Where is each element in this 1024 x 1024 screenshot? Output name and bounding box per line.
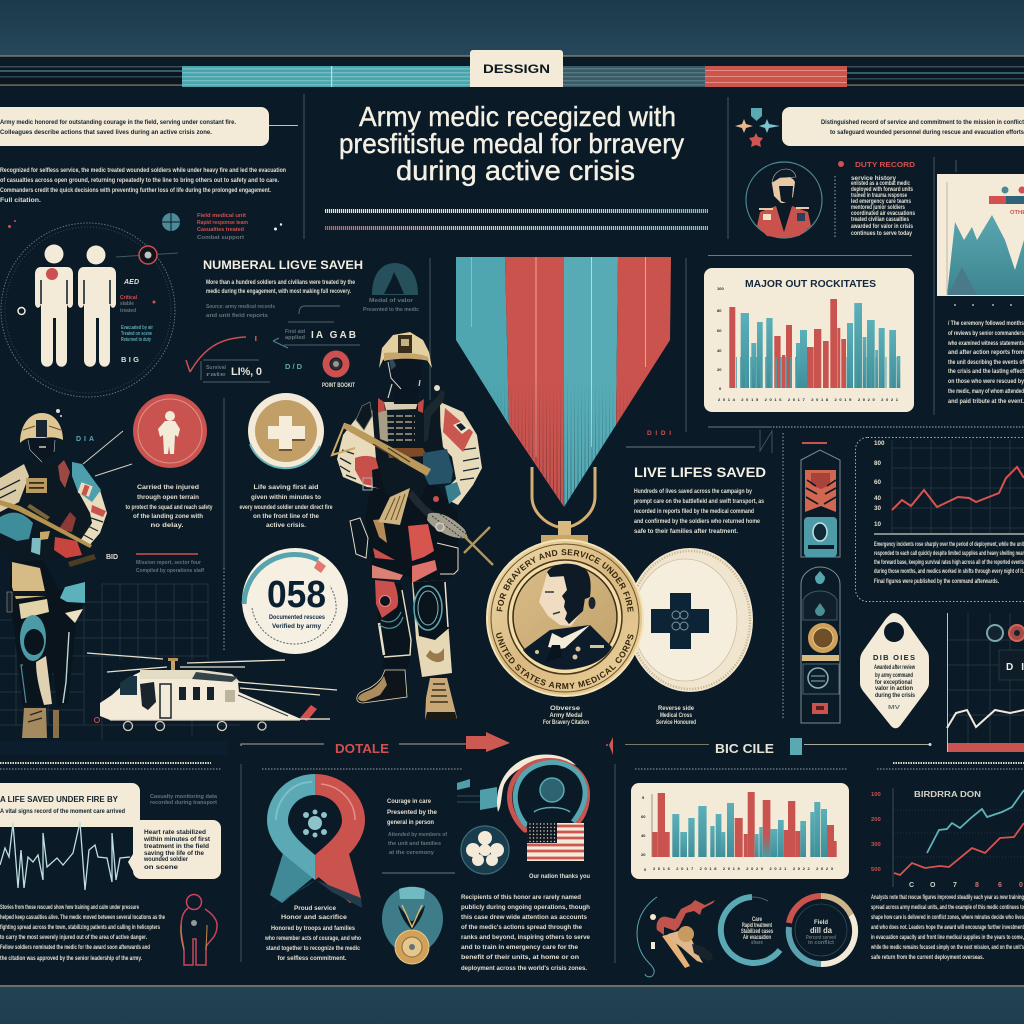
icon: red badge: [133, 394, 207, 468]
heading: lives saved: [626, 430, 766, 480]
text: red badge: [126, 484, 213, 574]
text: numeral lives saved: Source: army medical records: [206, 304, 275, 310]
bottom rules and dividers: [0, 763, 1024, 986]
profile text: awarded for valor in crisis: [851, 223, 913, 230]
left soldier illustration: [0, 409, 132, 738]
profile text: trained in trauma response: [851, 192, 907, 199]
medal: necktie: [545, 645, 562, 663]
line chart panel: red trend: 30: [874, 505, 882, 512]
text block: bottom left: [0, 904, 165, 962]
soldier: rifle grip: [408, 490, 434, 518]
left soldier: pouch: [7, 592, 12, 612]
icon: standing figure: [78, 246, 116, 367]
title: Army medic recegized with: [359, 101, 676, 132]
counter dial 058: [242, 548, 348, 654]
intro text block: of casualties across open ground, returning repeatedly to the line to bring others out to safety and to care.: [0, 177, 279, 184]
header ribbon strip: [0, 56, 1024, 87]
text: under ribbon: stand together to recognize the medic: [266, 945, 360, 952]
left soldier: annotations: DIA: [76, 436, 94, 443]
bar chart panel: bottom: 60: [641, 814, 646, 819]
section divider: DOTALE: DOTALE: [335, 741, 389, 756]
section divider: BIC CILE: BIC CILE: [715, 741, 774, 756]
text block: bottom left: Fellow soldiers nominated the medic for the award soon afterwards and: [0, 944, 150, 951]
text: beside ribbon: Courage in care: [387, 798, 431, 805]
soldier: left leg: [375, 580, 412, 668]
medal loop: [532, 467, 595, 544]
stat rows: IA GAB: [311, 330, 356, 341]
bar chart panel: bottom: 2016 2017 2018 2019 2020 2021 2022 2023: [653, 866, 834, 871]
soldier: shoulder strap: [424, 390, 445, 442]
text: beside ribbon: general in person: [387, 819, 434, 826]
ECG speech bubble: on scene: [144, 864, 179, 871]
circle panel: casualty figures: Evacuated by air: [121, 325, 154, 331]
text: medical cross: on the front line of the: [253, 513, 319, 520]
text: medical cross: [240, 484, 333, 529]
line chart panel: red trend: 100: [874, 440, 885, 447]
text block: bottom left: to carry the most severely injured out of the area of active danger.: [0, 934, 147, 941]
ECG speech bubble: saving the life of the: [144, 850, 204, 857]
profile text: deployed with forward units: [851, 186, 913, 193]
text block: right column: [947, 320, 1024, 405]
circle panel: casualty figures: BIG: [121, 355, 139, 364]
intro text block: Recognized for selfless service, the medic treated wounded soldiers while under heavy fire and led the evacuation: [0, 167, 286, 174]
top band: [0, 0, 1024, 56]
stat rows: [186, 306, 360, 382]
stat rows: LI%, 0: [231, 366, 262, 378]
hanging tag: Awarded after review: [874, 664, 915, 671]
line chart: dual trend: [871, 788, 1024, 889]
ECG speech bubble: wounded soldier: [143, 856, 188, 863]
text: red badge: through open terrain: [137, 494, 199, 501]
icon: wounded figure: [35, 244, 73, 367]
grid behind left soldier and helicopter: [0, 584, 240, 740]
small legend: red notes: [8, 213, 282, 241]
medal: face: [539, 569, 587, 626]
circle panel: casualty figures: AED: [123, 279, 139, 286]
profile text: service history: [851, 175, 896, 182]
text block: lives saved: [634, 488, 764, 535]
vertical divider: [303, 94, 305, 239]
donut chart: four colour: in conflict: [808, 940, 834, 946]
text: red badge: Carried the injured: [137, 484, 199, 491]
intro text block: Commanders credit the quick decisions with preventing further loss of life during the prolonged engagement.: [0, 187, 271, 194]
text: beside ribbon: Presented by the: [387, 809, 437, 816]
title rule lines: [325, 211, 708, 228]
left soldier: boots: [22, 708, 47, 738]
profile text: enlisted as a combat medic: [851, 180, 910, 187]
bar chart panel: bottom: 20: [641, 852, 646, 857]
ECG callout panel: [0, 783, 218, 827]
hanging tag: during the crisis: [875, 692, 915, 699]
stat rows: rate: [206, 372, 226, 378]
text block: bottom right: [870, 894, 1024, 961]
title: during active crisis: [396, 155, 635, 186]
soldier: barrel: [463, 527, 493, 565]
profile text: led emergency care teams: [851, 198, 911, 205]
flag: [527, 823, 584, 861]
donut chart: four colour: [789, 896, 855, 964]
hanging tag: DIB OIES: [873, 653, 915, 662]
line chart: dual trend: 8: [975, 882, 979, 889]
bar chart panel: bottom: 0: [644, 867, 647, 872]
bar chart panel: top: [704, 268, 914, 412]
dark shadow strip under left art: [0, 741, 228, 755]
soldier: teal pouch: [423, 449, 453, 485]
left soldier: teal shoulder: [72, 462, 101, 502]
bar chart panel: top: 80: [717, 308, 722, 313]
text block: center column: benefit of their units, at home or on: [461, 954, 579, 961]
medal captions: Army Medal: [550, 712, 583, 719]
text: red badge: to protect the squad and reach safety: [126, 504, 213, 511]
small legend: red notes: Field medical unit: [197, 213, 246, 219]
hanging tag: [860, 613, 929, 728]
line chart: dual trend: 7: [953, 882, 957, 889]
bar chart panel: bottom: [631, 783, 849, 879]
header tab: DESSIGN: [483, 62, 550, 76]
text block: lives saved: and confirmed by the soldiers who returned home: [634, 518, 760, 525]
donut chart: teal: share: [751, 940, 763, 946]
icon: keys and stethoscope: [637, 897, 715, 977]
text: under ribbon: [264, 905, 361, 962]
donut chart: teal: Air evacuation: [743, 934, 771, 941]
text block: center column: publicly during ongoing operations, though: [461, 904, 590, 911]
profile text: coordinated air evacuations: [851, 210, 915, 217]
profile text: continues to serve today: [851, 230, 912, 237]
text block: bottom left: fighting spread across the town, stabilizing patients and calling in helicopters: [0, 924, 160, 931]
soldier: red arm patch: [443, 408, 473, 452]
ECG speech bubble: within minutes of first: [143, 836, 211, 843]
text: beside ribbon: the unit and families: [388, 841, 441, 847]
donut chart: teal: [721, 897, 780, 963]
ECG speech bubble: Heart rate stabilized: [144, 829, 206, 836]
line chart: dual trend: O: [930, 882, 936, 889]
rule above line chart: [708, 427, 1024, 453]
left soldier: teal flap: [60, 582, 85, 603]
soldier: rifle body: [343, 423, 431, 476]
gold medal with portrait: [486, 539, 644, 697]
text: under ribbon: Honor and sacrifice: [281, 914, 348, 921]
ECG callout panel: Casualty monitoring data: [150, 794, 218, 800]
heading: numeral lives saved: NUMBERAL LIGVE SAVEH: [203, 258, 363, 272]
small legend: red notes: Combat support: [197, 235, 244, 241]
left soldier: right arm: [78, 467, 107, 547]
icon: stars: [735, 108, 780, 147]
medal: face shadow: [562, 573, 587, 624]
line chart panel: red trend: 80: [874, 460, 882, 467]
soldier: left boot: [357, 670, 407, 703]
heading: lives saved: DIDI: [647, 430, 671, 437]
medal captions: Reverse side: [658, 705, 694, 712]
left soldier: legs: [8, 560, 85, 706]
bar chart panel: top: 2014 2015 2016 2017 2018 2019 2020 2021: [718, 397, 899, 402]
bar chart panel: top: 20: [717, 367, 722, 372]
profile text: mentored junior soldiers: [851, 204, 905, 211]
medal captions: Obverse: [550, 705, 581, 712]
text: red badge: no delay.: [150, 522, 184, 529]
circle panel: casualty figures: treated: [120, 308, 136, 314]
stat rows: First aid: [285, 329, 306, 335]
ECG speech bubble: treatment in the field: [144, 843, 209, 850]
text: medical cross: active crisis.: [266, 522, 306, 529]
hanging tag: MV: [888, 705, 900, 711]
donut chart: four colour: Field: [814, 919, 828, 926]
soldier: thigh pocket: [437, 543, 458, 574]
soldier: right arm: [440, 402, 482, 505]
icon: flag emblem: Our nation thanks you: [529, 873, 590, 880]
vertical badge column: [801, 442, 840, 723]
bar chart panel: top: 60: [717, 328, 722, 333]
portrait medallion: [746, 162, 822, 238]
profile text: [851, 175, 915, 237]
line chart: dual trend: 100: [871, 792, 881, 798]
text: beside ribbon: Attended by members of: [388, 832, 447, 838]
line chart panel: red trend: 40: [874, 495, 882, 502]
title: [339, 101, 684, 186]
intro text block: [0, 167, 286, 204]
medal captions: Service Honoured: [656, 719, 696, 726]
text: numeral lives saved: and unit field reports: [206, 313, 268, 319]
title: presfitisfue medal for brravery: [339, 128, 684, 159]
dotted divider: [834, 176, 836, 239]
soldier: magazine: [378, 488, 410, 525]
left soldier: rifle: [0, 500, 92, 548]
donut chart: teal: Care: [752, 916, 762, 923]
arrow: [466, 732, 510, 752]
dividers: right column: [430, 157, 956, 432]
donut chart: four colour: Percent served: [806, 935, 836, 941]
bar chart panel: bottom: 9: [642, 795, 645, 800]
text block: bottom right: safe return from the current deployment overseas.: [871, 954, 984, 961]
left soldier: chest tag: [26, 478, 47, 493]
left soldier: left arm cream: [0, 464, 29, 512]
intro text block: Full citation.: [0, 197, 41, 204]
circle panel: casualty figures: [1, 223, 178, 397]
ECG line: [0, 822, 130, 890]
icon: medal on blue collar: [382, 887, 443, 964]
text: numeral lives saved: medic during the engagement, with most making full recovery.: [206, 288, 351, 295]
text block: center column: [461, 894, 590, 972]
text: under ribbon: for selfless commitment.: [278, 955, 347, 962]
medal: hair: [547, 564, 591, 599]
donut chart: four colour: dill da: [810, 926, 833, 935]
icon: medical cross badge: [248, 393, 324, 469]
mini line chart: bottom right: [947, 613, 1024, 752]
awareness ribbon emblem: [267, 774, 365, 908]
text: medical cross: given within minutes to: [251, 494, 321, 501]
small legend: red notes: Rapid response team: [197, 220, 248, 226]
text: medical cross: Life saving first aid: [254, 484, 319, 491]
callout: top left: Army medic honored for outstanding courage in the field, serving under constant fire.: [0, 119, 236, 126]
gold medal with portrait: FOR BRAVERY AND SERVICE UNDER FIRE: [496, 549, 634, 612]
medal captions: Medical Cross: [660, 712, 692, 719]
medal: collar and tie: [548, 625, 590, 649]
counter dial 058: Verified by army: [272, 623, 321, 630]
circle panel: casualty figures: stable: [120, 301, 134, 307]
soldier: rifle stock: [332, 423, 355, 455]
text: under ribbon: Honored by troops and families: [271, 925, 355, 932]
left soldier illustration: BID: [106, 554, 118, 561]
second coin: cross reverse: [627, 548, 753, 692]
hanging tag: for exceptional: [875, 679, 912, 686]
line chart panel: red trend: 10: [874, 521, 882, 528]
callout: top right: [782, 107, 1024, 146]
text block: center column: this case drew wide attention as accounts: [461, 914, 587, 921]
text block: center column: ranks and beyond, inspiring others to serve: [461, 934, 590, 941]
soldier: helmet: [379, 332, 432, 368]
soldier: holster: [350, 518, 368, 558]
text block: bottom left: helped keep casualties alive. The medic moved between several locations as the: [0, 914, 165, 921]
small legend: red notes: Casualties treated: [197, 227, 244, 233]
heading: lives saved: LIVE LIFES SAVED: [634, 464, 766, 480]
text: medical cross: every wounded soldier under direct fire: [240, 504, 333, 511]
ECG callout panel: A LIFE SAVED UNDER FIRE BY: [0, 795, 119, 804]
vertical divider right of title: [727, 97, 729, 239]
soldier: right boot: [425, 678, 457, 720]
left soldier: shin cream: [36, 656, 52, 705]
line chart: dual trend: 0: [1019, 882, 1023, 889]
text block: lives saved: recorded in reports filed by the medical command: [634, 508, 754, 515]
circle panel: casualty figures: Returned to duty: [121, 337, 151, 343]
line chart: dual trend: 6: [998, 882, 1002, 889]
medal captions: For Bravery Citation: [543, 719, 589, 726]
text: under ribbon: who remember acts of courage, and who: [264, 935, 361, 942]
profile heading: DUTY RECORD: [855, 160, 916, 169]
donut chart: teal: Rapid treatment: [742, 922, 773, 929]
icon: suited figure outline: [181, 894, 217, 965]
circle panel: casualty figures: Treated on scene: [121, 331, 152, 337]
soldier: right leg: [412, 580, 452, 677]
callout: top left: [0, 107, 298, 146]
counter dial 058: 058: [267, 574, 326, 616]
mini line chart: bottom right: DI: [1006, 662, 1024, 673]
bar chart panel: top: MAJOR OUT ROCKITATES: [745, 279, 876, 290]
dotted divider: [782, 433, 784, 720]
header tab: [470, 50, 563, 87]
area chart panel: [937, 174, 1024, 306]
text: beside ribbon: at the ceremony: [389, 850, 435, 856]
text: numeral lives saved: [206, 279, 355, 319]
left soldier: teal knee: [20, 615, 46, 661]
gold medal with portrait: UNITED STATES ARMY MEDICAL CORPS: [496, 632, 634, 689]
left soldier: red glove: [54, 537, 82, 558]
icon: flag emblem: [457, 755, 590, 880]
stat rows: D/D: [285, 362, 303, 371]
marker: wound: [46, 268, 58, 280]
marker: ring target: [116, 246, 178, 264]
bar chart panel: bottom: 40: [641, 833, 646, 838]
hanging tag: by army command: [875, 672, 913, 679]
section divider: BIC CILE: [606, 737, 932, 756]
text: red badge: Compiled by operations staff: [136, 568, 204, 574]
line chart: dual trend: BIRDRRA DON: [914, 790, 981, 799]
text: numeral lives saved: More than a hundred soldiers and civilians were treated by the: [206, 279, 355, 286]
soldier: face: [387, 358, 423, 390]
profile text: treated civilian casualties: [851, 216, 909, 223]
counter dial 058: Documented rescues: [269, 614, 325, 621]
soldier: hips: [365, 484, 458, 582]
line chart: dual trend: 500: [871, 867, 881, 873]
medal: uniform: [523, 625, 612, 669]
stat rows: applied: [285, 335, 306, 341]
bar chart panel: top: 0: [719, 386, 722, 391]
line chart: dual trend: 200: [871, 817, 881, 823]
medal: decorations: [535, 645, 604, 660]
circle panel: casualty figures: Critical: [120, 295, 137, 301]
text block: bottom left: the citation was approved by the senior leadership of the army.: [0, 955, 142, 962]
icon: hood emblem: [363, 263, 419, 313]
main soldier illustration: [332, 332, 493, 720]
ECG speech bubble: [128, 820, 221, 879]
bottom band: [0, 987, 1024, 1024]
text: under ribbon: Proud service: [294, 905, 336, 912]
left soldier: torso: [0, 460, 107, 562]
soldier: red panels: [408, 524, 434, 561]
left soldier: head: [28, 438, 55, 462]
text: beside ribbon: [382, 798, 455, 873]
line chart panel: red trend: 60: [874, 479, 882, 486]
text block: lives saved: safe to their families after treatment.: [634, 528, 738, 535]
stat rows: Survival: [206, 365, 226, 371]
hanging tag: valor in action: [875, 685, 913, 692]
soldier: left arm: [337, 408, 394, 490]
text: red badge: of the landing zone with: [133, 513, 203, 520]
text: red badge: Mission report, sector four: [136, 560, 202, 566]
bar chart panel: top: 100: [717, 286, 724, 291]
donut chart: teal: Stabilized cases: [741, 928, 773, 935]
medal captions: [543, 705, 696, 726]
icon: flower in circle: [461, 826, 509, 874]
text block: center column: deployment across the world's crisis zones.: [461, 965, 587, 972]
medal: ear: [588, 597, 596, 609]
callout: top left: Colleagues describe actions that saved lives during an active crisis zone.: [0, 129, 212, 136]
text block: lives saved: Hundreds of lives saved across the campaign by: [634, 488, 752, 495]
soldier: neck: [388, 380, 420, 400]
icon: hood emblem: Medal of valor: [369, 298, 414, 304]
text block: center column: of the medic's actions spread through the: [461, 924, 582, 931]
left soldier: helmet: [20, 413, 63, 443]
left soldier: left sleeve teal: [0, 513, 33, 541]
ECG callout panel: recorded during transport: [150, 800, 217, 806]
ribbon of medal: [456, 257, 671, 507]
left soldier: tan thigh: [12, 562, 46, 599]
soldier: vest: [372, 405, 441, 497]
bar chart panel: top: 40: [717, 348, 722, 353]
icon: red ring badge: POINT BOOKIT: [322, 382, 355, 389]
text block: center column: and to train in emergency care for the: [461, 944, 579, 951]
text block: center column: Recipients of this honor are rarely named: [461, 894, 581, 901]
ECG callout panel: A vital signs record of the moment care arrived: [0, 808, 125, 815]
vertical divider: [223, 398, 225, 652]
text block: lives saved: prompt care on the battlefield and swift transport, as: [634, 498, 764, 505]
helicopter illustration: [87, 653, 337, 730]
line chart: dual trend: 300: [871, 842, 881, 848]
line chart: dual trend: C: [909, 882, 914, 889]
text block: bottom left: Stories from those rescued show how training and calm under pressure: [0, 904, 139, 911]
icon: hood emblem: Presented to the medic: [363, 307, 419, 313]
icon: red ring badge: [322, 350, 355, 389]
line chart panel: red trend: [856, 438, 1024, 602]
